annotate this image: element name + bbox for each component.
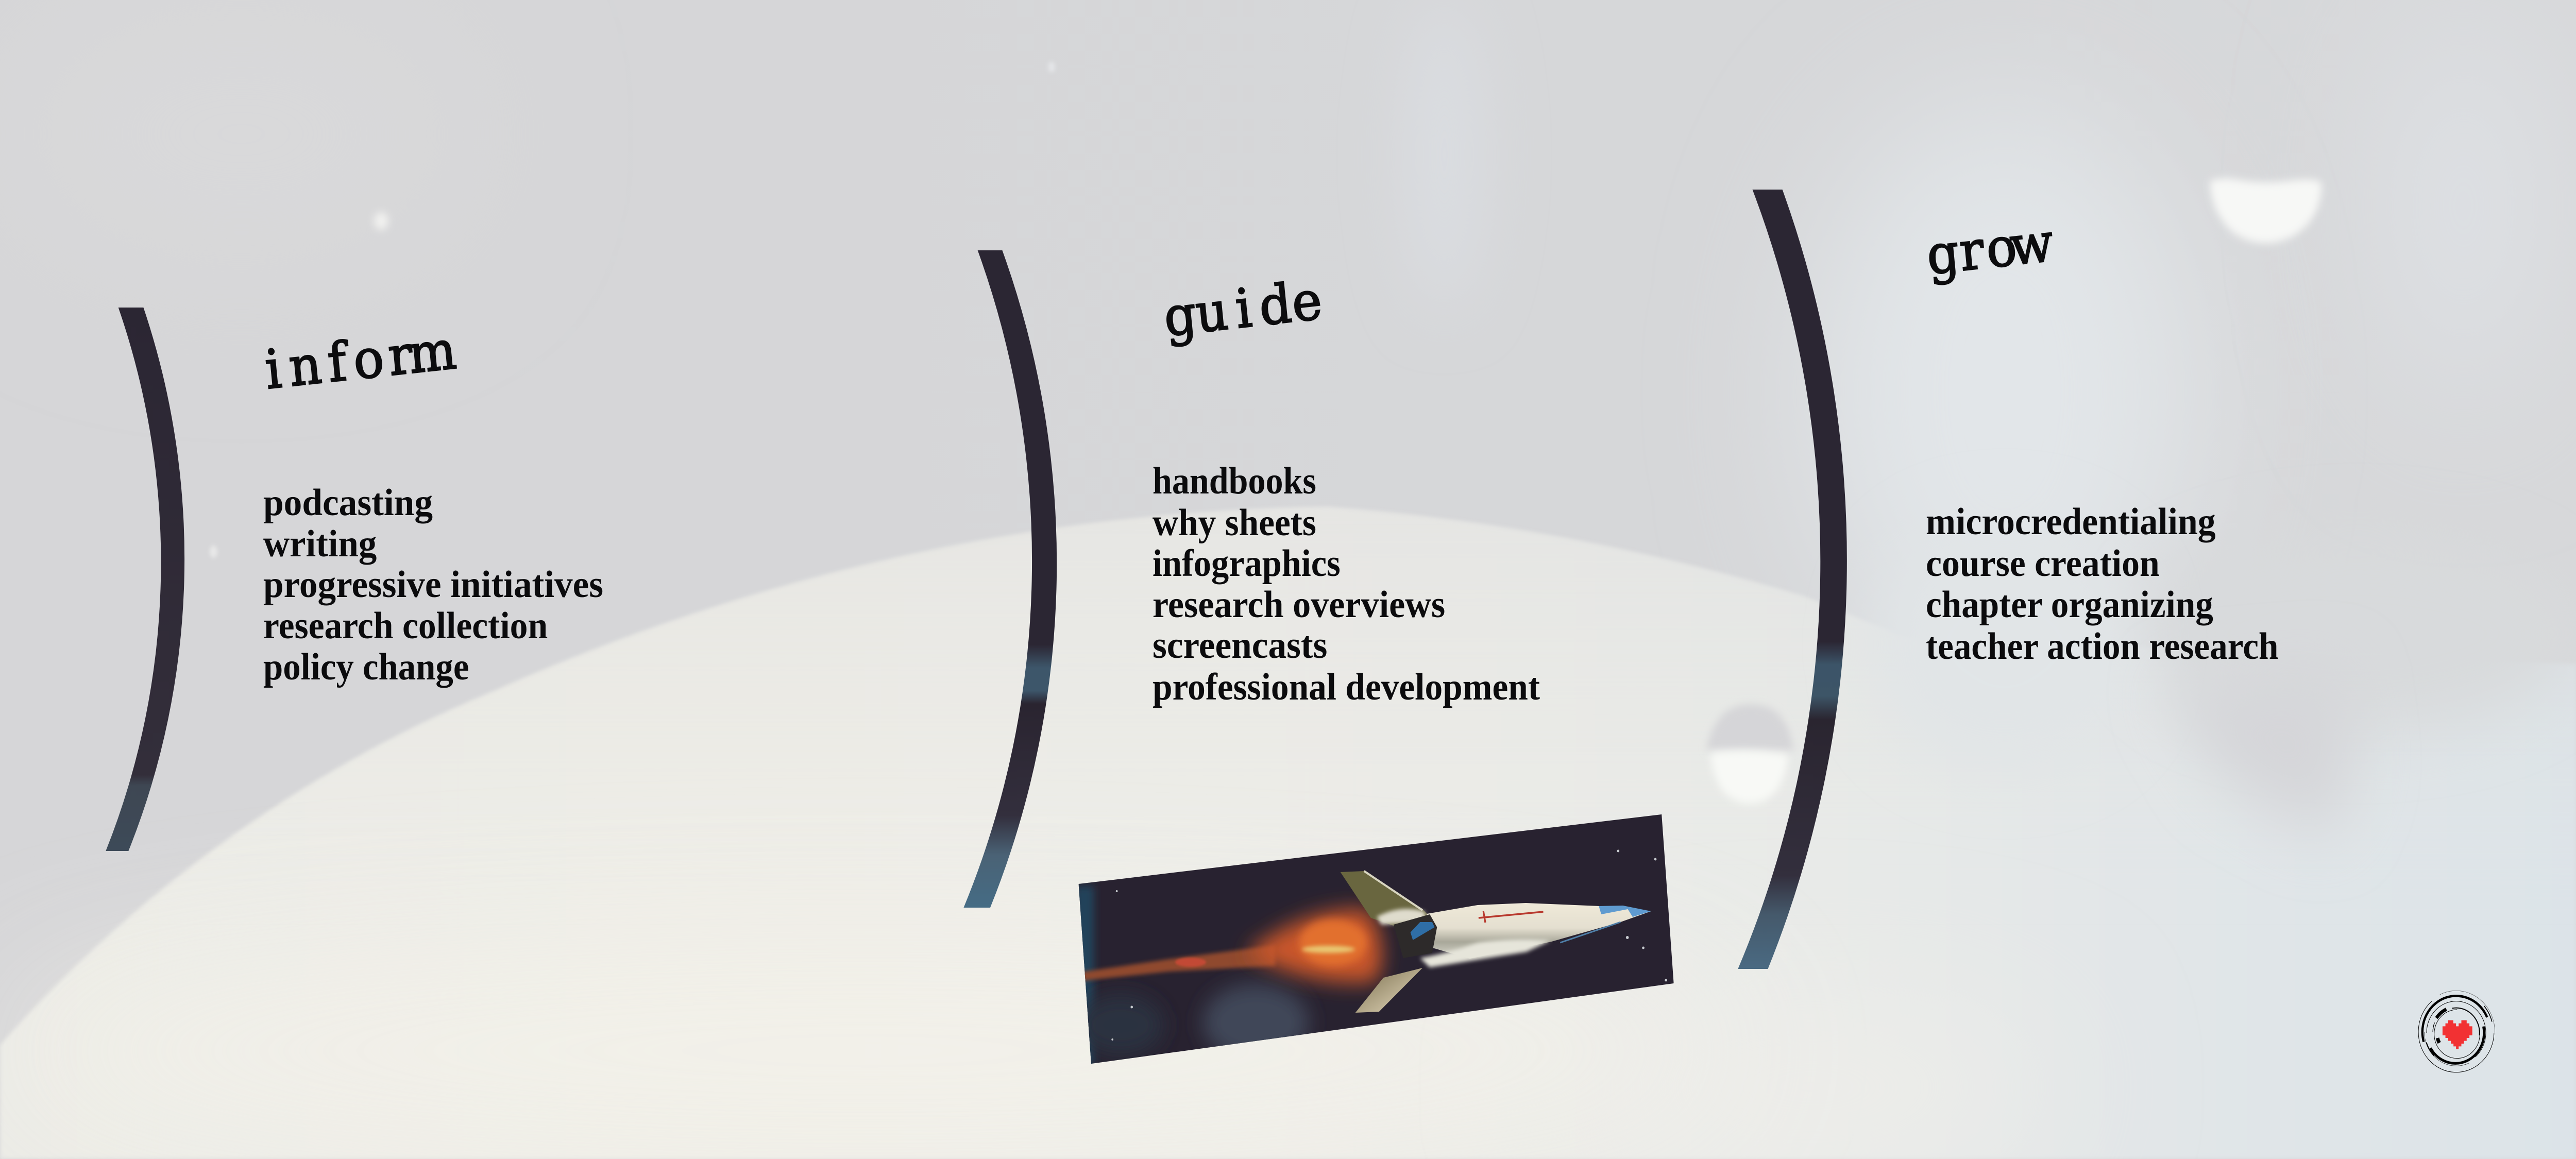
bracket arc: inform	[106, 308, 184, 851]
engine section	[1394, 914, 1437, 958]
text list: guide: professional development	[1153, 666, 1540, 708]
text list: grow: chapter organizing	[1926, 583, 2213, 626]
bracket arc: guide	[963, 250, 1057, 908]
moon: lower with grey dome	[1706, 704, 1793, 804]
rocket body	[1418, 903, 1651, 959]
heading: grow: grow	[1924, 211, 2056, 287]
text list: guide	[1153, 459, 1540, 708]
photo stars	[1076, 850, 1667, 1041]
text list: guide: why sheets	[1153, 501, 1316, 544]
text list: guide: screencasts	[1153, 624, 1327, 667]
heading: guide: guide	[1161, 268, 1325, 349]
text list: guide: infographics	[1153, 542, 1341, 585]
text list: inform: podcasting	[263, 481, 433, 524]
flame	[1246, 909, 1382, 983]
heading: inform: inform	[262, 318, 459, 401]
nose cone	[1599, 906, 1651, 917]
moon: upper right	[2210, 178, 2321, 243]
text list: grow: teacher action research	[1926, 625, 2278, 668]
text list: inform	[263, 481, 603, 688]
star specks	[210, 62, 1055, 558]
exhaust tail	[1082, 945, 1275, 981]
text list: grow	[1926, 500, 2278, 668]
text list: guide: research overviews	[1153, 583, 1445, 626]
badge: pixel heart in circuit rings	[2404, 976, 2509, 1087]
text list: inform: writing	[263, 522, 377, 565]
rocket photo	[1079, 814, 1674, 1064]
planet	[0, 507, 2576, 1159]
bracket arc: grow	[1738, 190, 1847, 969]
exhaust smoke	[1420, 940, 1551, 967]
lower fin	[1355, 968, 1422, 1013]
red marking	[1479, 911, 1543, 923]
text list: inform: progressive initiatives	[263, 563, 603, 606]
text list: grow: course creation	[1926, 542, 2160, 585]
text list: inform: policy change	[263, 645, 469, 688]
text list: inform: research collection	[263, 604, 548, 647]
text list: guide: handbooks	[1153, 459, 1316, 502]
heart	[2443, 1020, 2472, 1049]
rings	[2404, 976, 2509, 1087]
upper fin	[1341, 871, 1433, 927]
text list: grow: microcredentialing	[1926, 500, 2216, 543]
